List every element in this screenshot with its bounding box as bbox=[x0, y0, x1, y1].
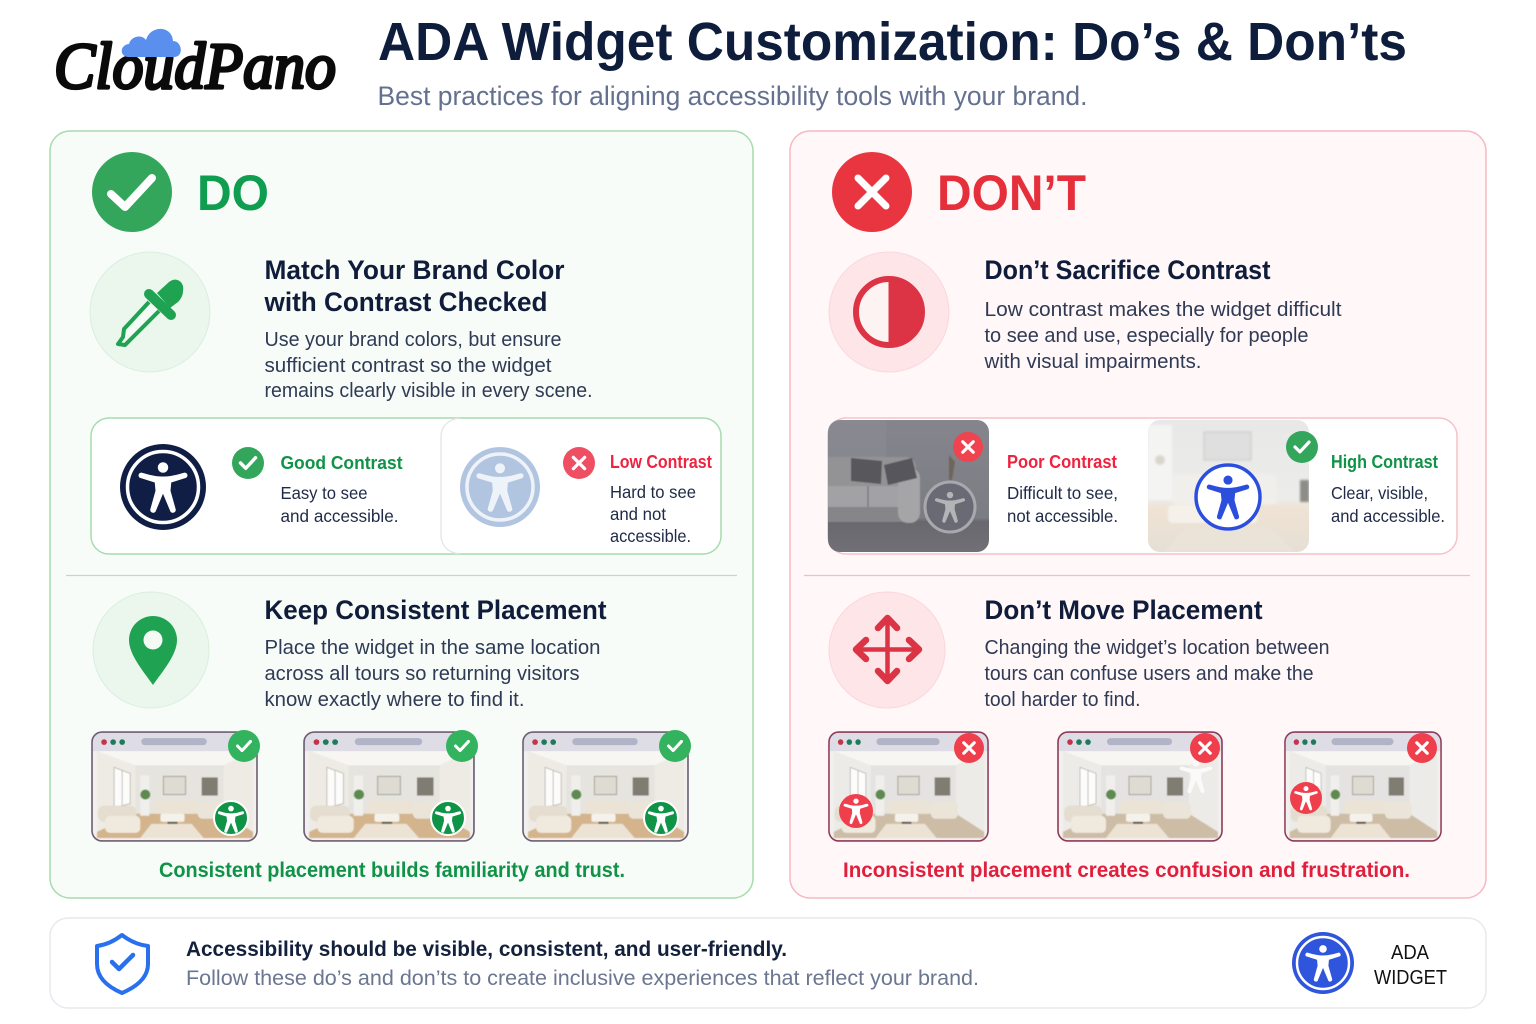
icon: check bbox=[1286, 431, 1318, 463]
text: high contrast: Clear, visible, bbox=[1331, 483, 1428, 503]
icon: visible widget bbox=[1194, 463, 1262, 531]
consistent thumbnail 1 bbox=[92, 730, 260, 841]
inconsistent thumbnail 2 bbox=[1058, 732, 1222, 841]
icon: shield bbox=[97, 935, 148, 993]
text: good contrast bbox=[280, 453, 402, 526]
don't caption: Inconsistent placement creates confusion and frustration. bbox=[843, 859, 1410, 882]
text: high contrast: and accessible. bbox=[1331, 506, 1445, 526]
ada widget label bbox=[1374, 942, 1447, 989]
text: good contrast: Easy to see bbox=[280, 483, 368, 503]
icon: check bbox=[232, 447, 264, 479]
text: low contrast: and not bbox=[610, 504, 666, 524]
text: sacrifice contrast: Don’t Sacrifice Contrast bbox=[984, 255, 1271, 285]
footer message: Follow these do’s and don’ts to create inclusive experiences that reflect your brand. bbox=[186, 966, 979, 990]
text: consistent placement: across all tours so returning visitors bbox=[264, 663, 580, 685]
inconsistent thumbnail 1 bbox=[829, 732, 988, 841]
ada widget label: ADA bbox=[1391, 942, 1430, 964]
text: low contrast bbox=[610, 452, 712, 546]
text: sacrifice contrast: Low contrast makes the widget difficult bbox=[984, 299, 1342, 321]
panel: don't bbox=[790, 131, 1486, 898]
icon: half contrast bbox=[829, 252, 949, 372]
icon: cloud bbox=[122, 29, 181, 57]
text: match brand color bbox=[264, 255, 592, 402]
contrast example card bbox=[820, 418, 1457, 554]
text: consistent placement bbox=[264, 595, 607, 711]
text: match brand color: Use your brand colors, but ensure bbox=[264, 329, 562, 351]
text: good contrast: Good Contrast bbox=[280, 453, 402, 473]
text: match brand color: Match Your Brand Color bbox=[264, 255, 565, 285]
title: ADA Widget Customization: Do’s & Don’ts bbox=[378, 12, 1407, 72]
text: move placement: tours can confuse users and make the bbox=[984, 663, 1314, 685]
text: match brand color: with Contrast Checked bbox=[264, 287, 548, 317]
text: low contrast: Low Contrast bbox=[610, 452, 712, 472]
text: match brand color: sufficient contrast so the widget bbox=[264, 355, 552, 377]
text: high contrast bbox=[1331, 452, 1445, 526]
icon: move arrows bbox=[829, 592, 945, 708]
icon: faded widget bbox=[925, 482, 975, 532]
text: sacrifice contrast: to see and use, especially for people bbox=[984, 325, 1308, 347]
logo wordmark: CloudPano bbox=[54, 30, 336, 103]
text: consistent placement: Keep Consistent Placement bbox=[264, 595, 607, 625]
do heading: DO bbox=[197, 165, 269, 221]
text: good contrast: and accessible. bbox=[280, 506, 398, 526]
consistent thumbnail 3 bbox=[523, 730, 691, 841]
icon: ada widget bbox=[1292, 932, 1354, 994]
text: move placement: Don’t Move Placement bbox=[984, 595, 1263, 625]
contrast comparison card bbox=[91, 418, 721, 554]
ada widget label: WIDGET bbox=[1374, 967, 1447, 989]
logo bbox=[54, 29, 336, 103]
don't badge icon bbox=[832, 152, 912, 232]
panel: do bbox=[50, 131, 753, 898]
icon: cross bbox=[953, 432, 983, 462]
text: match brand color: remains clearly visible in every scene. bbox=[264, 380, 592, 402]
text: high contrast: High Contrast bbox=[1331, 452, 1438, 472]
consistent thumbnail 2 bbox=[304, 730, 478, 841]
do caption: Consistent placement builds familiarity and trust. bbox=[159, 859, 625, 882]
text: consistent placement: know exactly where to find it. bbox=[264, 689, 524, 711]
icon: eyedropper bbox=[90, 252, 210, 372]
text: low contrast: accessible. bbox=[610, 526, 691, 546]
text: sacrifice contrast: with visual impairments. bbox=[983, 351, 1202, 373]
text: poor contrast bbox=[1007, 452, 1118, 526]
icon: high contrast widget bbox=[120, 444, 206, 530]
icon: map pin bbox=[93, 592, 209, 708]
text: move placement: tool harder to find. bbox=[984, 689, 1140, 711]
icon: low contrast widget bbox=[460, 447, 540, 527]
text: poor contrast: not accessible. bbox=[1007, 506, 1118, 526]
footer message bbox=[186, 937, 979, 990]
text: low contrast: Hard to see bbox=[610, 482, 696, 502]
text: poor contrast: Difficult to see, bbox=[1007, 483, 1118, 503]
text: move placement bbox=[984, 595, 1330, 711]
text: sacrifice contrast bbox=[983, 255, 1342, 373]
footer panel bbox=[50, 918, 1486, 1008]
icon: cross bbox=[563, 447, 595, 479]
photo: high contrast bbox=[1148, 420, 1309, 552]
subtitle: Best practices for aligning accessibility tools with your brand. bbox=[378, 81, 1088, 111]
text: consistent placement: Place the widget in the same location bbox=[264, 637, 600, 659]
footer message: Accessibility should be visible, consistent, and user-friendly. bbox=[186, 937, 787, 961]
don't heading: DON’T bbox=[937, 165, 1086, 221]
inconsistent thumbnail 3 bbox=[1285, 732, 1441, 841]
text: poor contrast: Poor Contrast bbox=[1007, 452, 1117, 472]
text: move placement: Changing the widget’s location between bbox=[984, 637, 1330, 659]
photo: poor contrast bbox=[820, 420, 989, 552]
do badge icon bbox=[92, 152, 172, 232]
